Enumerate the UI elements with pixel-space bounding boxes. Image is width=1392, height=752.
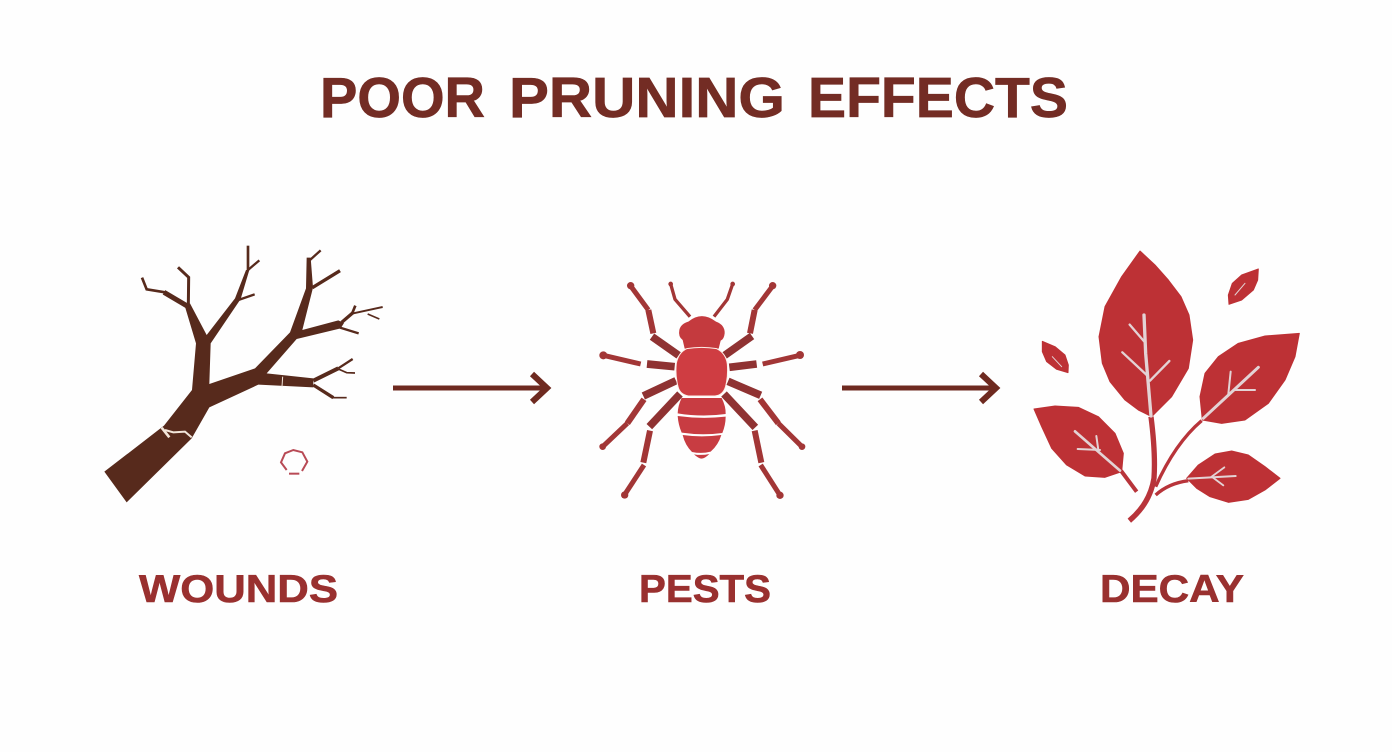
leaf veins xyxy=(1052,283,1258,485)
title xyxy=(320,66,1068,130)
icon: wounded tree xyxy=(104,246,383,502)
wound cracks xyxy=(162,377,283,437)
small top-right leaf xyxy=(1228,269,1258,304)
legs xyxy=(603,284,802,495)
label: wounds: WOUNDS xyxy=(139,568,338,611)
title: PRUNING xyxy=(509,66,785,130)
right leaf xyxy=(1200,333,1299,423)
icon: pest insect xyxy=(599,282,805,499)
icon: decaying leaves xyxy=(1034,251,1299,521)
label: decay: DECAY xyxy=(1100,568,1244,611)
bottom leaf xyxy=(1187,451,1280,502)
small ring mark xyxy=(281,450,307,474)
abdomen xyxy=(678,398,726,459)
thorax xyxy=(676,347,728,396)
label: pests: PESTS xyxy=(639,568,771,611)
arrow: pests to decay xyxy=(842,374,996,402)
stems xyxy=(1121,417,1202,521)
head xyxy=(679,316,725,349)
title: POOR xyxy=(320,66,485,130)
title: EFFECTS xyxy=(808,66,1068,130)
small left leaf xyxy=(1042,341,1068,373)
large top leaf xyxy=(1099,251,1193,417)
left leaf xyxy=(1034,406,1123,477)
arrow: wounds to pests xyxy=(393,374,547,402)
